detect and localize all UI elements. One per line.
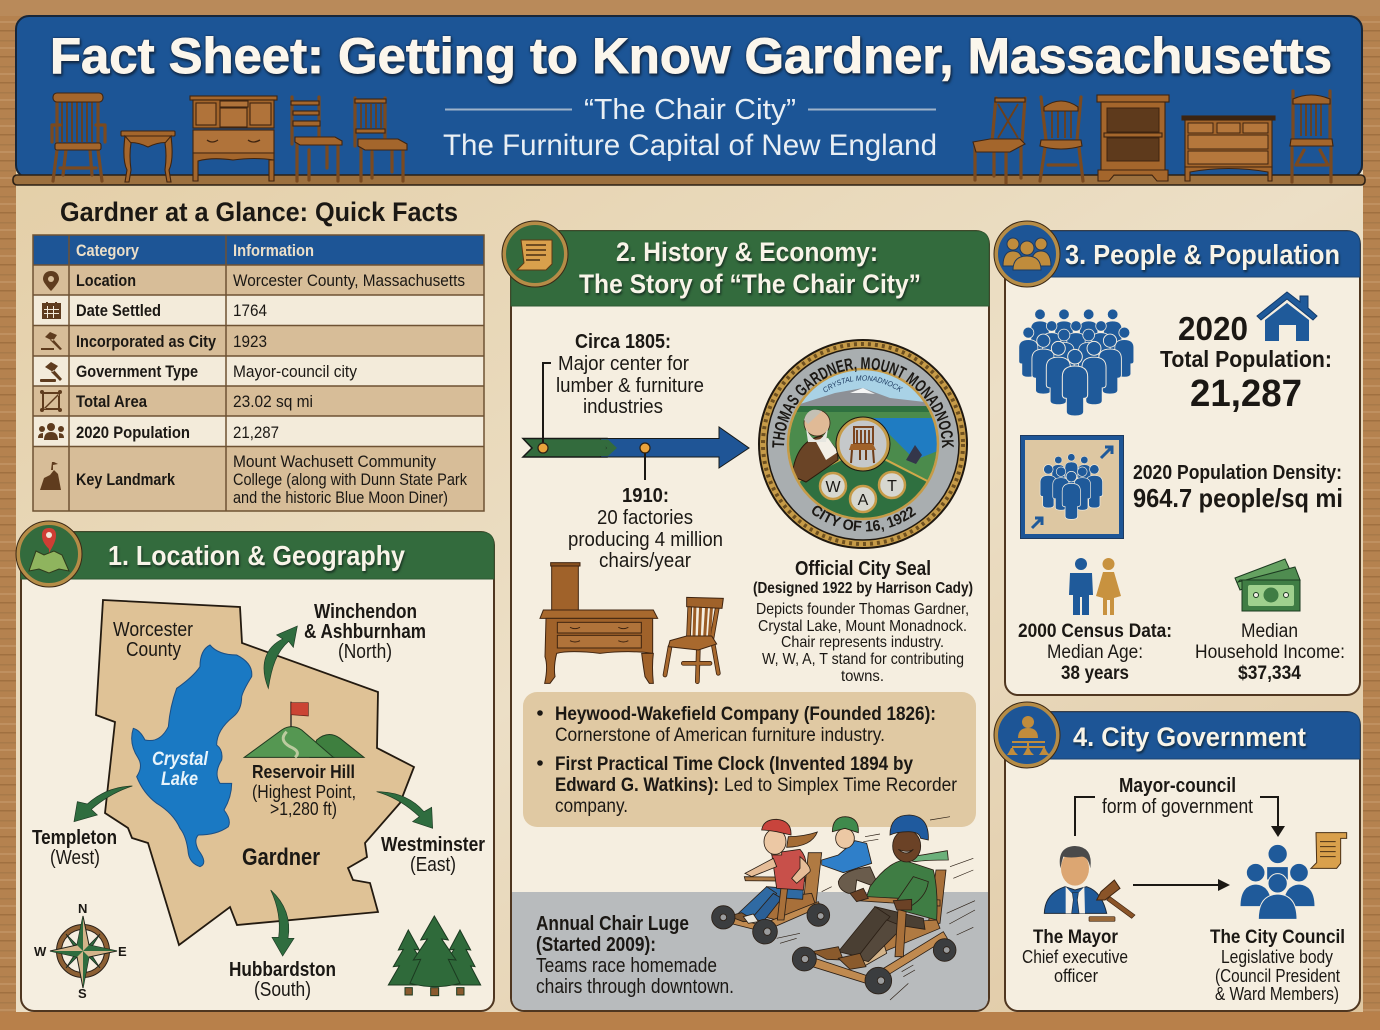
text: annual chair luge: Teams race homemade [536, 955, 717, 977]
icon: legislation scroll [1311, 833, 1347, 868]
subtitle [443, 94, 937, 162]
north label: Winchendon [314, 601, 417, 623]
stat: total population: Total Population: [1160, 346, 1332, 372]
form of government label: form of government [1102, 796, 1253, 818]
icon: council group [1240, 844, 1315, 919]
text: the mayor: Chief executive [1022, 947, 1128, 967]
seal letters: A [858, 492, 869, 509]
form of government label: Mayor-council [1119, 775, 1236, 797]
arrow: bracket to council [1075, 797, 1285, 837]
seal letters: W [825, 479, 841, 496]
stat: median household income: Median [1241, 621, 1298, 642]
text: the mayor: The Mayor [1033, 927, 1119, 948]
panel: people and population [994, 221, 1360, 695]
header banner [13, 16, 1365, 185]
table row values: 23.02 sq mi [233, 392, 313, 411]
table row values: Worcester County, Massachusetts [233, 271, 465, 290]
icon: house [1257, 292, 1317, 341]
map of Gardner: Lake [161, 769, 198, 790]
text: annual chair luge: (Started 2009): [536, 934, 656, 956]
table row labels: Location [76, 271, 136, 290]
heading: 3. People & Population [1065, 239, 1340, 270]
stat: median age: 2000 Census Data: [1018, 621, 1172, 642]
racer in green [792, 815, 956, 994]
heading: 2. History & Economy: [616, 237, 878, 267]
map of Gardner: Crystal [152, 749, 209, 770]
text: circa 1805: Major center for [558, 353, 689, 375]
Reservoir Hill: (Highest Point, [252, 782, 356, 802]
heading: The Story of “The Chair City” [579, 269, 921, 299]
subtitle: The Furniture Capital of New England [443, 129, 937, 162]
text: the mayor [1022, 927, 1128, 986]
text: seal caption [753, 558, 973, 685]
callout: notable companies: First Practical Time Clock (Invented 1894 by [555, 754, 913, 775]
quick facts heading: Gardner at a Glance: Quick Facts [60, 197, 458, 227]
city seal: THOMAS GARDNER, MOUNT MONADNOCK [772, 357, 954, 448]
text: 1910 [568, 485, 723, 572]
seal letters: T [887, 478, 897, 495]
map of Gardner: Gardner [242, 844, 320, 871]
icon: population density square [1020, 436, 1124, 538]
stat: population density: 2020 Population Density: [1133, 462, 1342, 484]
stat: total population: 2020 [1178, 310, 1248, 347]
heading [579, 237, 921, 299]
icon: mayor with gavel [1044, 846, 1135, 921]
table row labels: Government Type [76, 362, 198, 381]
callout: notable companies [523, 692, 976, 827]
stat: median household income [1195, 621, 1345, 684]
text: circa 1805: industries [583, 396, 663, 418]
text: seal caption: Depicts founder Thomas Gardner, [756, 601, 969, 618]
callout: notable companies: company. [555, 796, 628, 817]
south label [229, 959, 336, 1001]
furniture: right group [973, 91, 1333, 183]
west label: (West) [50, 847, 100, 869]
title: Fact Sheet: Getting to Know Gardner, Massachusetts [50, 28, 1332, 84]
Reservoir Hill: Reservoir Hill [252, 762, 355, 782]
text: seal caption: towns. [841, 668, 884, 685]
icon: group [994, 221, 1060, 287]
text: annual chair luge: Annual Chair Luge [536, 913, 689, 935]
text: annual chair luge [536, 913, 734, 998]
text: the city council: Legislative body [1221, 947, 1333, 967]
callout: notable companies: Led to Simplex Time Recorder [724, 775, 958, 796]
table row labels: Total Area [76, 392, 147, 411]
icon: crowd [1019, 309, 1134, 416]
parchment background [16, 170, 1363, 1012]
stat: population density [1133, 462, 1343, 513]
stat: median age: Median Age: [1047, 642, 1143, 663]
racer in red [712, 819, 830, 944]
illustration: chair luge racers [712, 815, 975, 1000]
map of Gardner: Worcester [113, 619, 193, 641]
text: 1910: 20 factories [597, 507, 693, 529]
subtitle: “The Chair City” [584, 94, 796, 126]
table row labels: 2020 Population [76, 423, 190, 442]
Reservoir Hill [244, 702, 364, 819]
stat: median age: 38 years [1061, 663, 1129, 684]
table header row [76, 241, 314, 260]
icon: banknotes [1235, 559, 1300, 611]
wooden shelf [13, 175, 1365, 185]
quick facts table [33, 235, 484, 511]
form of government label [1102, 775, 1253, 818]
seal letters [820, 472, 905, 512]
text: 1910: producing 4 million [568, 529, 723, 551]
icon: compass rose [34, 901, 127, 1001]
speed lines [777, 817, 975, 1000]
Reservoir Hill: >1,280 ft) [270, 799, 337, 819]
table row values: 1923 [233, 332, 267, 351]
text: circa 1805: lumber & furniture [556, 375, 704, 397]
text: circa 1805: Circa 1805: [575, 331, 671, 353]
west label [32, 827, 117, 869]
callout: notable companies: Edward G. Watkins): [555, 775, 719, 796]
table row values: Mount Wachusett Community [233, 452, 436, 471]
panel: city government [994, 702, 1360, 1011]
text: circa 1805 [556, 331, 704, 418]
table icons [38, 271, 64, 490]
city seal [758, 339, 968, 549]
callout: notable companies: Cornerstone of American furniture industry. [555, 725, 885, 746]
text: seal caption: Official City Seal [795, 558, 931, 580]
table row labels: Incorporated as City [76, 332, 216, 351]
icon: compass rose: S [78, 986, 87, 1001]
stat: median age [1018, 621, 1172, 684]
table row values: College (along with Dunn State Park [233, 470, 467, 489]
text: the mayor: officer [1054, 966, 1098, 986]
table row labels: Date Settled [76, 301, 161, 320]
east label: (East) [410, 854, 456, 876]
child pushing [822, 817, 877, 893]
text: 1910: chairs/year [599, 550, 691, 572]
table row labels: Key Landmark [76, 470, 175, 489]
icon: pine trees [388, 916, 481, 996]
text: the city council: (Council President [1215, 966, 1340, 986]
arrows: neighbouring towns [74, 626, 433, 956]
south label: (South) [254, 979, 311, 1001]
stat: median household income: Household Income: [1195, 642, 1345, 663]
city seal: CITY OF 16, 1922 [812, 506, 916, 532]
table row values: and the historic Blue Moon Diner) [233, 488, 448, 507]
table header row: Category [76, 241, 139, 260]
map of Gardner [96, 600, 414, 945]
heading: 1. Location & Geography [108, 540, 405, 571]
text: seal caption: Chair represents industry. [781, 634, 944, 651]
north label [304, 601, 426, 663]
north label: (North) [338, 641, 392, 663]
table row labels [76, 271, 216, 489]
furniture: left group [52, 93, 407, 182]
stat: total population [1160, 310, 1332, 415]
stat: total population: 21,287 [1190, 373, 1302, 415]
seal central chair [836, 417, 890, 471]
panel: location and geography [16, 521, 494, 1011]
icon: compass rose: W [34, 944, 47, 959]
table row values [233, 271, 467, 507]
table header row: Information [233, 241, 314, 260]
text: 1910: 1910: [622, 485, 669, 507]
table row values: 21,287 [233, 423, 279, 442]
callout: notable companies: Heywood-Wakefield Company (Founded 1826): [555, 704, 936, 725]
icon: org chart [994, 702, 1060, 768]
map of Gardner: County [126, 639, 181, 661]
timeline arrow [523, 363, 749, 480]
table row values: Mayor-council city [233, 362, 357, 381]
icon: compass rose: E [118, 944, 127, 959]
stat: median household income: $37,334 [1238, 663, 1301, 684]
icon: scroll [502, 221, 568, 287]
west label: Templeton [32, 827, 117, 849]
stat: population density: 964.7 people/sq mi [1133, 483, 1343, 513]
text: the city council: The City Council [1210, 927, 1345, 948]
east label [381, 834, 485, 876]
text: the city council [1210, 927, 1345, 1004]
text: seal caption: W, W, A, T stand for contributing [762, 651, 964, 668]
text: seal caption: Crystal Lake, Mount Monadnock. [758, 618, 967, 635]
icon: compass rose: N [78, 901, 87, 916]
table row values: 1764 [233, 301, 267, 320]
text: the city council: & Ward Members) [1215, 984, 1339, 1004]
Crystal Lake [132, 645, 252, 867]
text: seal caption: (Designed 1922 by Harrison Cady) [753, 580, 973, 597]
icon: map pin [16, 521, 82, 587]
arrow: mayor to council [1133, 879, 1230, 891]
city seal: CRYSTAL MONADNOCK [823, 375, 903, 392]
north label: & Ashburnham [304, 621, 426, 643]
south label: Hubbardston [229, 959, 336, 981]
heading: 4. City Government [1073, 722, 1306, 752]
panel: history and economy [502, 220, 990, 1012]
icon: man and woman [1069, 558, 1121, 615]
furniture: desk and chair [540, 563, 723, 683]
east label: Westminster [381, 834, 485, 856]
text: annual chair luge: chairs through downtown. [536, 976, 734, 998]
